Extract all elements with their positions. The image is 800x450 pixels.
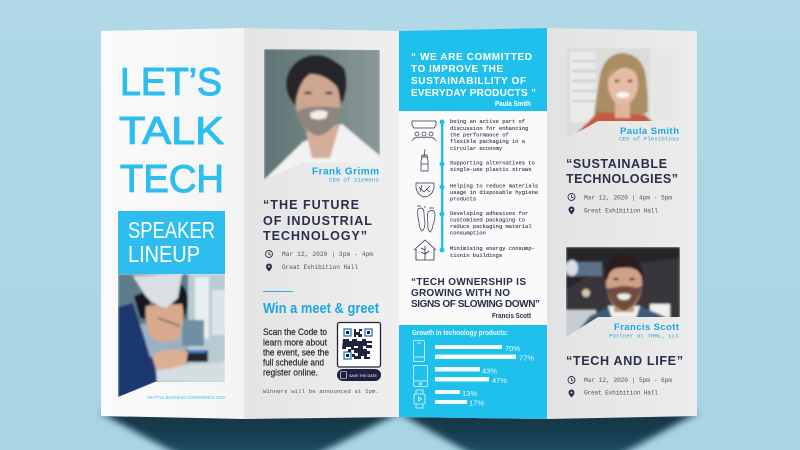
quote banner: EVERYDAY PRODUCTS ”	[411, 88, 536, 99]
photo: Paula Smith	[568, 48, 654, 138]
growth chart panel	[399, 325, 547, 419]
panel: Frank Grimm	[244, 28, 399, 419]
bar values: 43%	[482, 366, 497, 376]
icon: location pin	[266, 264, 272, 272]
save the date button	[337, 369, 381, 381]
icon: location pin	[568, 390, 574, 398]
icon: tablet	[414, 366, 428, 386]
icon: feet	[417, 206, 435, 232]
icon: shower	[412, 121, 436, 141]
bar values: 13%	[462, 389, 477, 398]
timeline	[440, 120, 444, 252]
scan text	[263, 326, 329, 378]
icon: clock	[568, 194, 575, 200]
talk title: “THE FUTURE	[263, 198, 359, 212]
second quote: Francis Scott	[492, 313, 532, 320]
second quote	[411, 277, 540, 320]
scan text: the event, see the	[263, 346, 329, 358]
speaker name: Partner at THML, LLC	[609, 332, 680, 340]
speaker name: CEO of FlexiGloss	[619, 136, 679, 142]
speaker name: CEO of Siemens	[329, 176, 379, 184]
speaker name: Paula Smith	[620, 126, 679, 137]
scan text: register online.	[263, 366, 318, 378]
bar values: 70%	[505, 344, 520, 353]
commitments list: single-use plastic straws	[450, 166, 532, 173]
speaker name	[609, 322, 680, 340]
commitments list: the performance of	[450, 132, 509, 138]
commitments list: circular economy	[450, 145, 503, 152]
photo: Francis Scott	[566, 247, 680, 340]
bar values: 17%	[469, 398, 484, 408]
second quote: “TECH OWNERSHIP IS	[411, 277, 526, 288]
venue: Great Exhibition Hall	[282, 264, 358, 271]
talk title	[566, 157, 678, 186]
quote banner: SUSTAINABILLITY OF	[411, 76, 526, 87]
photo: engineer at microscope	[118, 274, 225, 399]
icon: diaper	[416, 183, 434, 197]
commitments list: reduce packaging material	[450, 223, 532, 230]
icon: green house	[414, 240, 436, 260]
venue: Great Exhibition Hall	[584, 390, 658, 396]
win heading: Win a meet & greet	[263, 300, 379, 317]
title: Let's Talk Tech: LET’S	[120, 61, 222, 104]
title: Let's Talk Tech: TECH	[120, 158, 224, 201]
date and time: Mar 12, 2020 | 5pm - 6pm	[584, 377, 672, 384]
speaker lineup box: LINEUP	[128, 241, 200, 267]
talk title	[263, 198, 372, 243]
icon: smartwatch	[414, 390, 425, 408]
commitments list: products	[450, 196, 476, 202]
commitments list: Developing adhesives for	[450, 210, 528, 217]
talk title: “SUSTAINABLE	[566, 157, 667, 171]
footer: conference name: SEATTLE BUSINESS CONFERENCE 2020	[147, 395, 225, 400]
quote banner	[399, 28, 547, 111]
commitments list: usage in disposable hygiene	[450, 189, 538, 196]
speaker name	[312, 166, 379, 184]
commitments list	[450, 118, 538, 259]
save the date button: SAVE THE DATE	[349, 374, 377, 378]
second quote: SIGNS OF SLOWING DOWN”	[411, 299, 540, 310]
talk title: TECHNOLOGY”	[263, 229, 367, 243]
talk title: OF INDUSTRIAL	[263, 214, 372, 228]
scan text: learn more about	[263, 336, 327, 348]
photo: Frank Grimm	[262, 49, 380, 182]
date and time: Mar 12, 2020 | 4pm - 5pm	[584, 194, 672, 202]
icon: phone	[414, 340, 424, 362]
commitments list: Supporting alternatives to	[450, 160, 535, 166]
commitments list: flexible packaging in a	[450, 138, 526, 145]
quote banner: TO IMPROVE THE	[411, 64, 503, 75]
quote banner: Paula Smith	[495, 99, 531, 108]
speaker name: Francis Scott	[614, 322, 680, 333]
speaker name	[619, 126, 679, 142]
venue: Great Exhibition Hall	[584, 208, 658, 214]
panel: quote and commitments	[399, 28, 547, 419]
QR code	[338, 322, 380, 367]
panel: Paula Smith and Francis Scott	[547, 28, 697, 419]
bar values: 77%	[519, 354, 534, 362]
growth chart panel: Growth in technology products:	[412, 330, 508, 337]
title: Let's Talk Tech	[119, 61, 224, 201]
shadows under brochure	[99, 412, 699, 450]
bar values	[462, 344, 534, 408]
talk title: “TECH AND LIFE”	[566, 354, 683, 368]
bars	[435, 345, 516, 404]
commitments list: consumption	[450, 230, 486, 236]
second quote: GROWING WITH NO	[411, 288, 510, 299]
icon: clock	[568, 376, 575, 384]
scan text: full schedule and	[263, 356, 324, 368]
icon: location pin	[568, 206, 574, 214]
icon: bottle	[421, 149, 428, 171]
scan text: Scan the Code to	[263, 326, 327, 337]
panel: cover	[101, 28, 244, 419]
commitments list: customised packaging to	[450, 216, 525, 224]
winners note: Winners will be announced at 5pm.	[263, 388, 379, 395]
commitments list: Minimising energy consump-	[450, 245, 535, 252]
quote banner: “ WE ARE COMMITTED	[411, 52, 532, 63]
icon: clock	[266, 250, 272, 258]
commitments list: being an active part of	[450, 118, 525, 125]
speaker lineup box: SPEAKER	[128, 217, 215, 243]
date and time: Mar 12, 2020 | 3pm - 4pm	[282, 251, 373, 258]
speaker lineup box	[118, 211, 225, 274]
commitments list: tionin buildings	[450, 252, 502, 259]
speaker name: Frank Grimm	[312, 166, 379, 178]
bar values: 47%	[492, 376, 507, 385]
talk title: TECHNOLOGIES”	[566, 172, 678, 186]
commitments list: Helping to reduce materials	[450, 182, 538, 190]
commitments list: discussion for enhancing	[450, 125, 528, 132]
title: Let's Talk Tech: TALK	[119, 110, 224, 153]
